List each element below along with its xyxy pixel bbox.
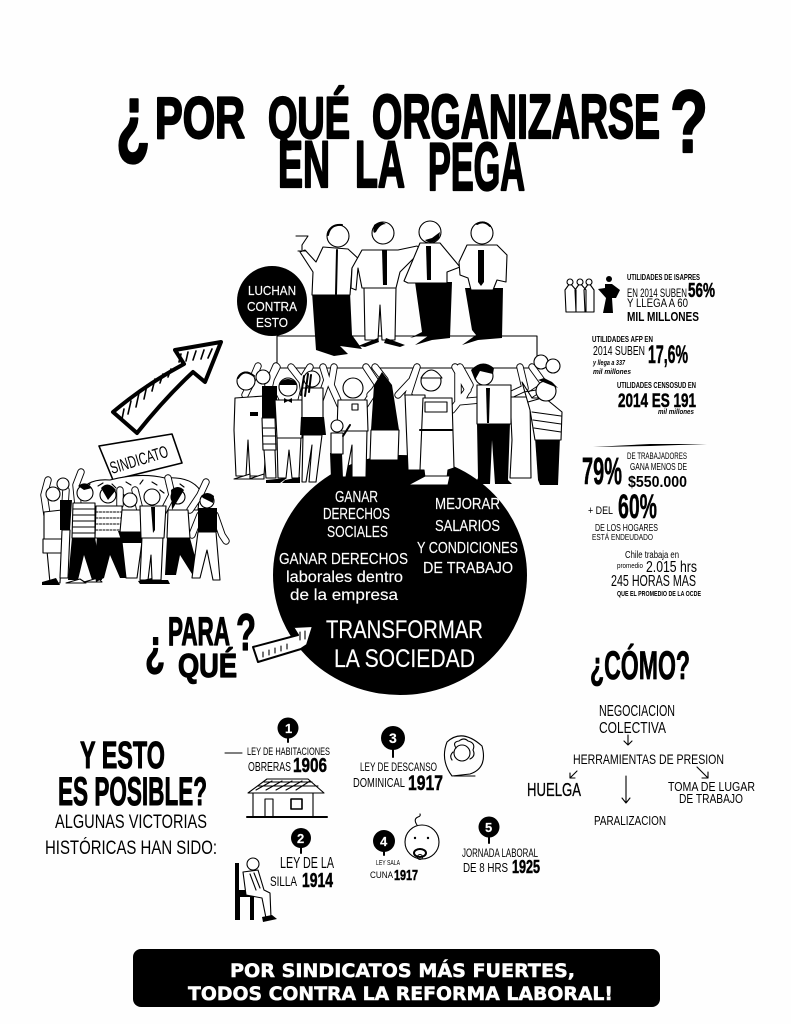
label: luchan contra esto: [237, 266, 307, 336]
man striped shirt: [66, 483, 102, 583]
stats: corporate profits: 17,6%: [648, 341, 688, 369]
central black circle: para qué: LA SOCIEDAD: [334, 645, 475, 673]
icon: baby with pacifier: [405, 814, 439, 860]
title: LA: [355, 127, 405, 201]
heading: y esto es posible: ES POSIBLE?: [58, 770, 207, 814]
worker 2 woman striped skirt: [256, 370, 287, 483]
central black circle: para qué: laborales dentro: [286, 569, 403, 586]
heading: para qué: ¿: [145, 619, 165, 677]
stats: corporate profits: UTILIDADES AFP EN: [592, 334, 653, 344]
worker 3 man with bow tie: [275, 378, 302, 483]
stats: workers and households: DE TRABAJADORES: [627, 451, 687, 462]
footer banner: [133, 949, 660, 1007]
crowd heads: [78, 475, 200, 510]
businessman 4: [459, 222, 507, 345]
illustration: four businessmen on a platform: [277, 221, 537, 368]
worker 9 background: [510, 397, 531, 478]
illustration: marching union crowd: [42, 472, 226, 585]
victory 4: ley sala cuna: 1917: [394, 867, 418, 884]
stats: workers and households: ESTÁ ENDEUDADO: [592, 532, 653, 542]
icon: group and boss: [565, 276, 620, 313]
victory 1: ley de habitaciones obreras: 1: [285, 721, 292, 736]
flow: how to organise: HUELGA: [527, 780, 581, 800]
worker 8 man with tie: [471, 363, 512, 484]
heading: y esto es posible: [45, 735, 217, 859]
title: ?: [670, 72, 708, 171]
icon: person sleeping on pillow: [444, 736, 484, 776]
man in black behind: [57, 478, 72, 578]
sign: sindicato: [99, 434, 182, 495]
woman with folder: [42, 487, 64, 585]
victory 5: jornada laboral de 8 horas: 1925: [512, 857, 540, 877]
woman with black hair: [165, 487, 198, 575]
heading: para qué: PARA: [168, 610, 230, 654]
heading: y esto es posible: ALGUNAS VICTORIAS: [55, 812, 207, 833]
stats: workers and households: 2.015 hrs: [646, 559, 697, 576]
worker 6 woman in black dress: [370, 372, 399, 490]
title: EN: [278, 127, 330, 201]
label: luchan contra esto: ESTO: [256, 316, 288, 330]
stats: workers and households: Chile trabaja en: [625, 550, 679, 561]
businessman 3: [404, 221, 460, 345]
worker 10 striped sweater: [522, 378, 562, 485]
stats: corporate profits: Y LLEGA A 60: [627, 296, 688, 310]
flow: how to organise: DE TRABAJO: [679, 791, 743, 806]
footer banner: TODOS CONTRA LA REFORMA LABORAL!: [188, 983, 613, 1005]
icon: man seated on chair: [235, 858, 277, 922]
stats: corporate profits: 2014 ES 191: [618, 391, 696, 412]
victory 1: ley de habitaciones obreras: 1906: [293, 755, 327, 777]
flow: how to organise: TOMA DE LUGAR: [668, 779, 755, 794]
victory 4: ley sala cuna: CUNA: [370, 870, 394, 881]
victory 5: jornada laboral de 8 horas: 5: [485, 820, 492, 835]
central black circle: para qué: TRANSFORMAR: [326, 616, 483, 644]
stats: corporate profits: 56%: [688, 280, 715, 302]
worker 1 woman: [234, 372, 267, 479]
title: ¿: [116, 66, 150, 168]
stats: corporate profits: mil millones: [593, 367, 631, 376]
victory 2: ley de la silla: 1914: [302, 870, 334, 892]
victory 1: ley de habitaciones obreras: [225, 718, 330, 817]
background worker: [405, 395, 425, 470]
businessman 2: [351, 222, 422, 347]
victory 1: ley de habitaciones obreras: OBRERAS: [248, 759, 291, 774]
victory 4: ley sala cuna: 4: [380, 834, 388, 849]
stats: corporate profits: [565, 272, 715, 416]
small arrow pointing to circle: [253, 626, 313, 662]
stats: workers and households: 60%: [618, 488, 657, 526]
label: luchan contra esto: CONTRA: [247, 300, 298, 314]
central black circle: para qué: GANAR DERECHOS: [279, 551, 408, 568]
woman in black top: [192, 493, 220, 580]
man patterned sweater: [94, 484, 131, 582]
victory 3: ley de descanso dominical: [353, 726, 484, 795]
stats: workers and households: DE LOS HOGARES: [595, 523, 658, 534]
footer banner: POR SINDICATOS MÁS FUERTES,: [230, 959, 575, 982]
background heads right: [534, 355, 560, 373]
central black circle: para qué: GANAR: [335, 489, 378, 506]
stats: workers and households: GANA MENOS DE: [630, 462, 687, 473]
central black circle: para qué: [273, 455, 527, 695]
flow: how to organise: PARALIZACION: [594, 813, 666, 828]
victory 5: jornada laboral de 8 horas: DE 8 HRS: [463, 860, 508, 875]
stats: corporate profits: UTILIDADES CENSOSUD EN: [617, 380, 696, 390]
victory 4: ley sala cuna: [370, 814, 439, 884]
title: QUÉ: [268, 86, 350, 151]
stats: workers and households: [582, 444, 707, 598]
title: [116, 66, 708, 205]
victory 3: ley de descanso dominical: DOMINICAL: [353, 775, 405, 790]
worker 4 long hair woman: [300, 371, 326, 482]
central black circle: para qué: DE TRABAJO: [423, 560, 513, 577]
heading: para qué: [145, 604, 256, 684]
victory 2: ley de la silla: LEY DE LA: [280, 855, 334, 872]
icon: house: [247, 779, 327, 817]
victory 2: ley de la silla: SILLA: [270, 873, 297, 889]
victory 5: jornada laboral de 8 horas: JORNADA LABORAL: [462, 846, 538, 860]
stats: corporate profits: MIL MILLONES: [627, 309, 699, 324]
central black circle: para qué: SOCIALES: [327, 524, 388, 541]
businessman 1 with glass: [296, 225, 362, 356]
stats: corporate profits: EN 2014 SUBEN: [627, 286, 687, 300]
victory 3: ley de descanso dominical: 3: [389, 730, 397, 746]
platform: [277, 336, 537, 368]
stats: corporate profits: 2014 SUBEN: [593, 343, 645, 358]
sign: sindicato: SINDICATO: [108, 442, 171, 478]
flow: how to organise: NEGOCIACION: [599, 703, 675, 720]
heading: cómo: ¿CÓMO?: [590, 642, 690, 688]
flow: how to organise: HERRAMIENTAS DE PRESION: [573, 751, 724, 767]
victory 3: ley de descanso dominical: 1917: [408, 772, 443, 795]
worker 5 man and child: [330, 378, 368, 479]
stats: workers and households: 245 HORAS MAS: [611, 573, 696, 590]
stats: corporate profits: y llega a 337: [592, 358, 626, 367]
victory 1: ley de habitaciones obreras: LEY DE HABITACIONES: [247, 746, 330, 758]
stats: workers and households: 79%: [582, 451, 622, 493]
victory 3: ley de descanso dominical: LEY DE DESCANSO: [360, 760, 437, 774]
victory 2: ley de la silla: 2: [297, 831, 304, 846]
man with tie: [138, 489, 170, 584]
stats: workers and households: + DEL: [588, 505, 613, 517]
woman black skirt: [118, 493, 144, 578]
illustration: workers holding up the platform: [234, 355, 562, 490]
central black circle: para qué: Y CONDICIONES: [417, 540, 518, 557]
title: PEGA: [428, 129, 525, 205]
heading: para qué: ?: [236, 604, 256, 662]
heading: y esto es posible: HISTÓRICAS HAN SIDO:: [45, 837, 217, 859]
heading: y esto es posible: Y ESTO: [80, 735, 165, 777]
worker 7 in helmet and overalls: [408, 370, 454, 485]
central black circle: para qué: SALARIOS: [435, 518, 500, 535]
central black circle: para qué: de la empresa: [290, 587, 398, 604]
stats: workers and households: QUE EL PROMEDIO DE LA OCDE: [617, 589, 701, 598]
flow: how to organise: COLECTIVA: [599, 720, 666, 737]
stats: corporate profits: mil millones: [658, 407, 694, 416]
victory 4: ley sala cuna: LEY SALA: [376, 858, 400, 867]
label: luchan contra esto: LUCHAN: [248, 284, 296, 298]
victory 5: jornada laboral de 8 horas: [462, 816, 540, 877]
stats: workers and households: $550.000: [628, 474, 687, 491]
title: POR: [155, 86, 245, 151]
victory 2: ley de la silla: [235, 828, 334, 922]
stats: corporate profits: UTILIDADES DE ISAPRES: [627, 272, 700, 282]
central black circle: para qué: MEJORAR: [435, 496, 500, 513]
big hatched arrow: [113, 342, 221, 433]
flow: how to organise: [527, 703, 755, 828]
stats: workers and households: promedio: [617, 563, 643, 570]
heading: para qué: QUÉ: [178, 647, 237, 684]
central black circle: para qué: DERECHOS: [323, 506, 390, 523]
